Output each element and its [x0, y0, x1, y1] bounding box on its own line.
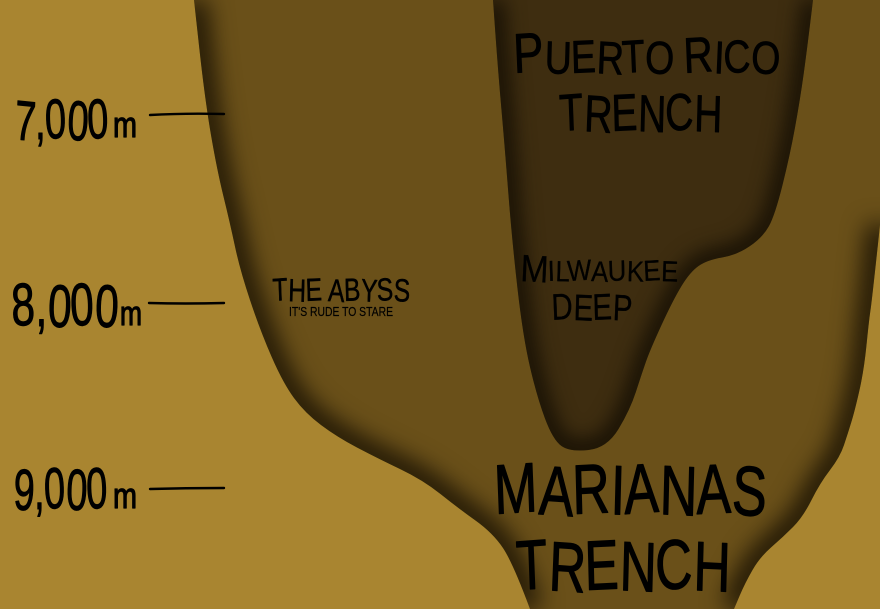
- depth marker: 7,000 m: m: [113, 104, 137, 145]
- label: The Abyss: IT'S RUDE TO STARE: [289, 304, 393, 319]
- depth marker: 7,000 m: [13, 87, 224, 152]
- heading: Puerto Rico Trench: [511, 20, 781, 144]
- depth marker: 8,000 m: [9, 271, 224, 340]
- depth marker: 8,000 m: m: [120, 295, 142, 333]
- panel: the abyss water body: [194, 0, 880, 609]
- heading: Marianas Trench: [492, 449, 769, 607]
- heading: Puerto Rico Trench: TRENCH: [558, 84, 724, 144]
- label: The Abyss: THE ABYSS: [271, 271, 411, 309]
- panel: Puerto Rico trench and Milwaukee Deep: [493, 0, 813, 450]
- label: Milwaukee Deep: MILWAUKEE: [520, 248, 679, 291]
- heading: Marianas Trench: MARIANAS: [492, 449, 769, 531]
- depth marker: 9,000 m: m: [113, 475, 137, 516]
- depth marker: 8,000 m: 8,000: [9, 271, 121, 340]
- depth marker: 9,000 m: 9,000: [12, 456, 109, 523]
- depth marker: 9,000 m: [12, 456, 224, 523]
- depth marker: 7,000 m: 7,000: [13, 87, 110, 152]
- label: Milwaukee Deep: DEEP: [550, 286, 634, 329]
- heading: Puerto Rico Trench: PUERTO RICO: [511, 20, 781, 85]
- label: Milwaukee Deep: [520, 248, 679, 329]
- heading: Marianas Trench: TRENCH: [514, 525, 732, 607]
